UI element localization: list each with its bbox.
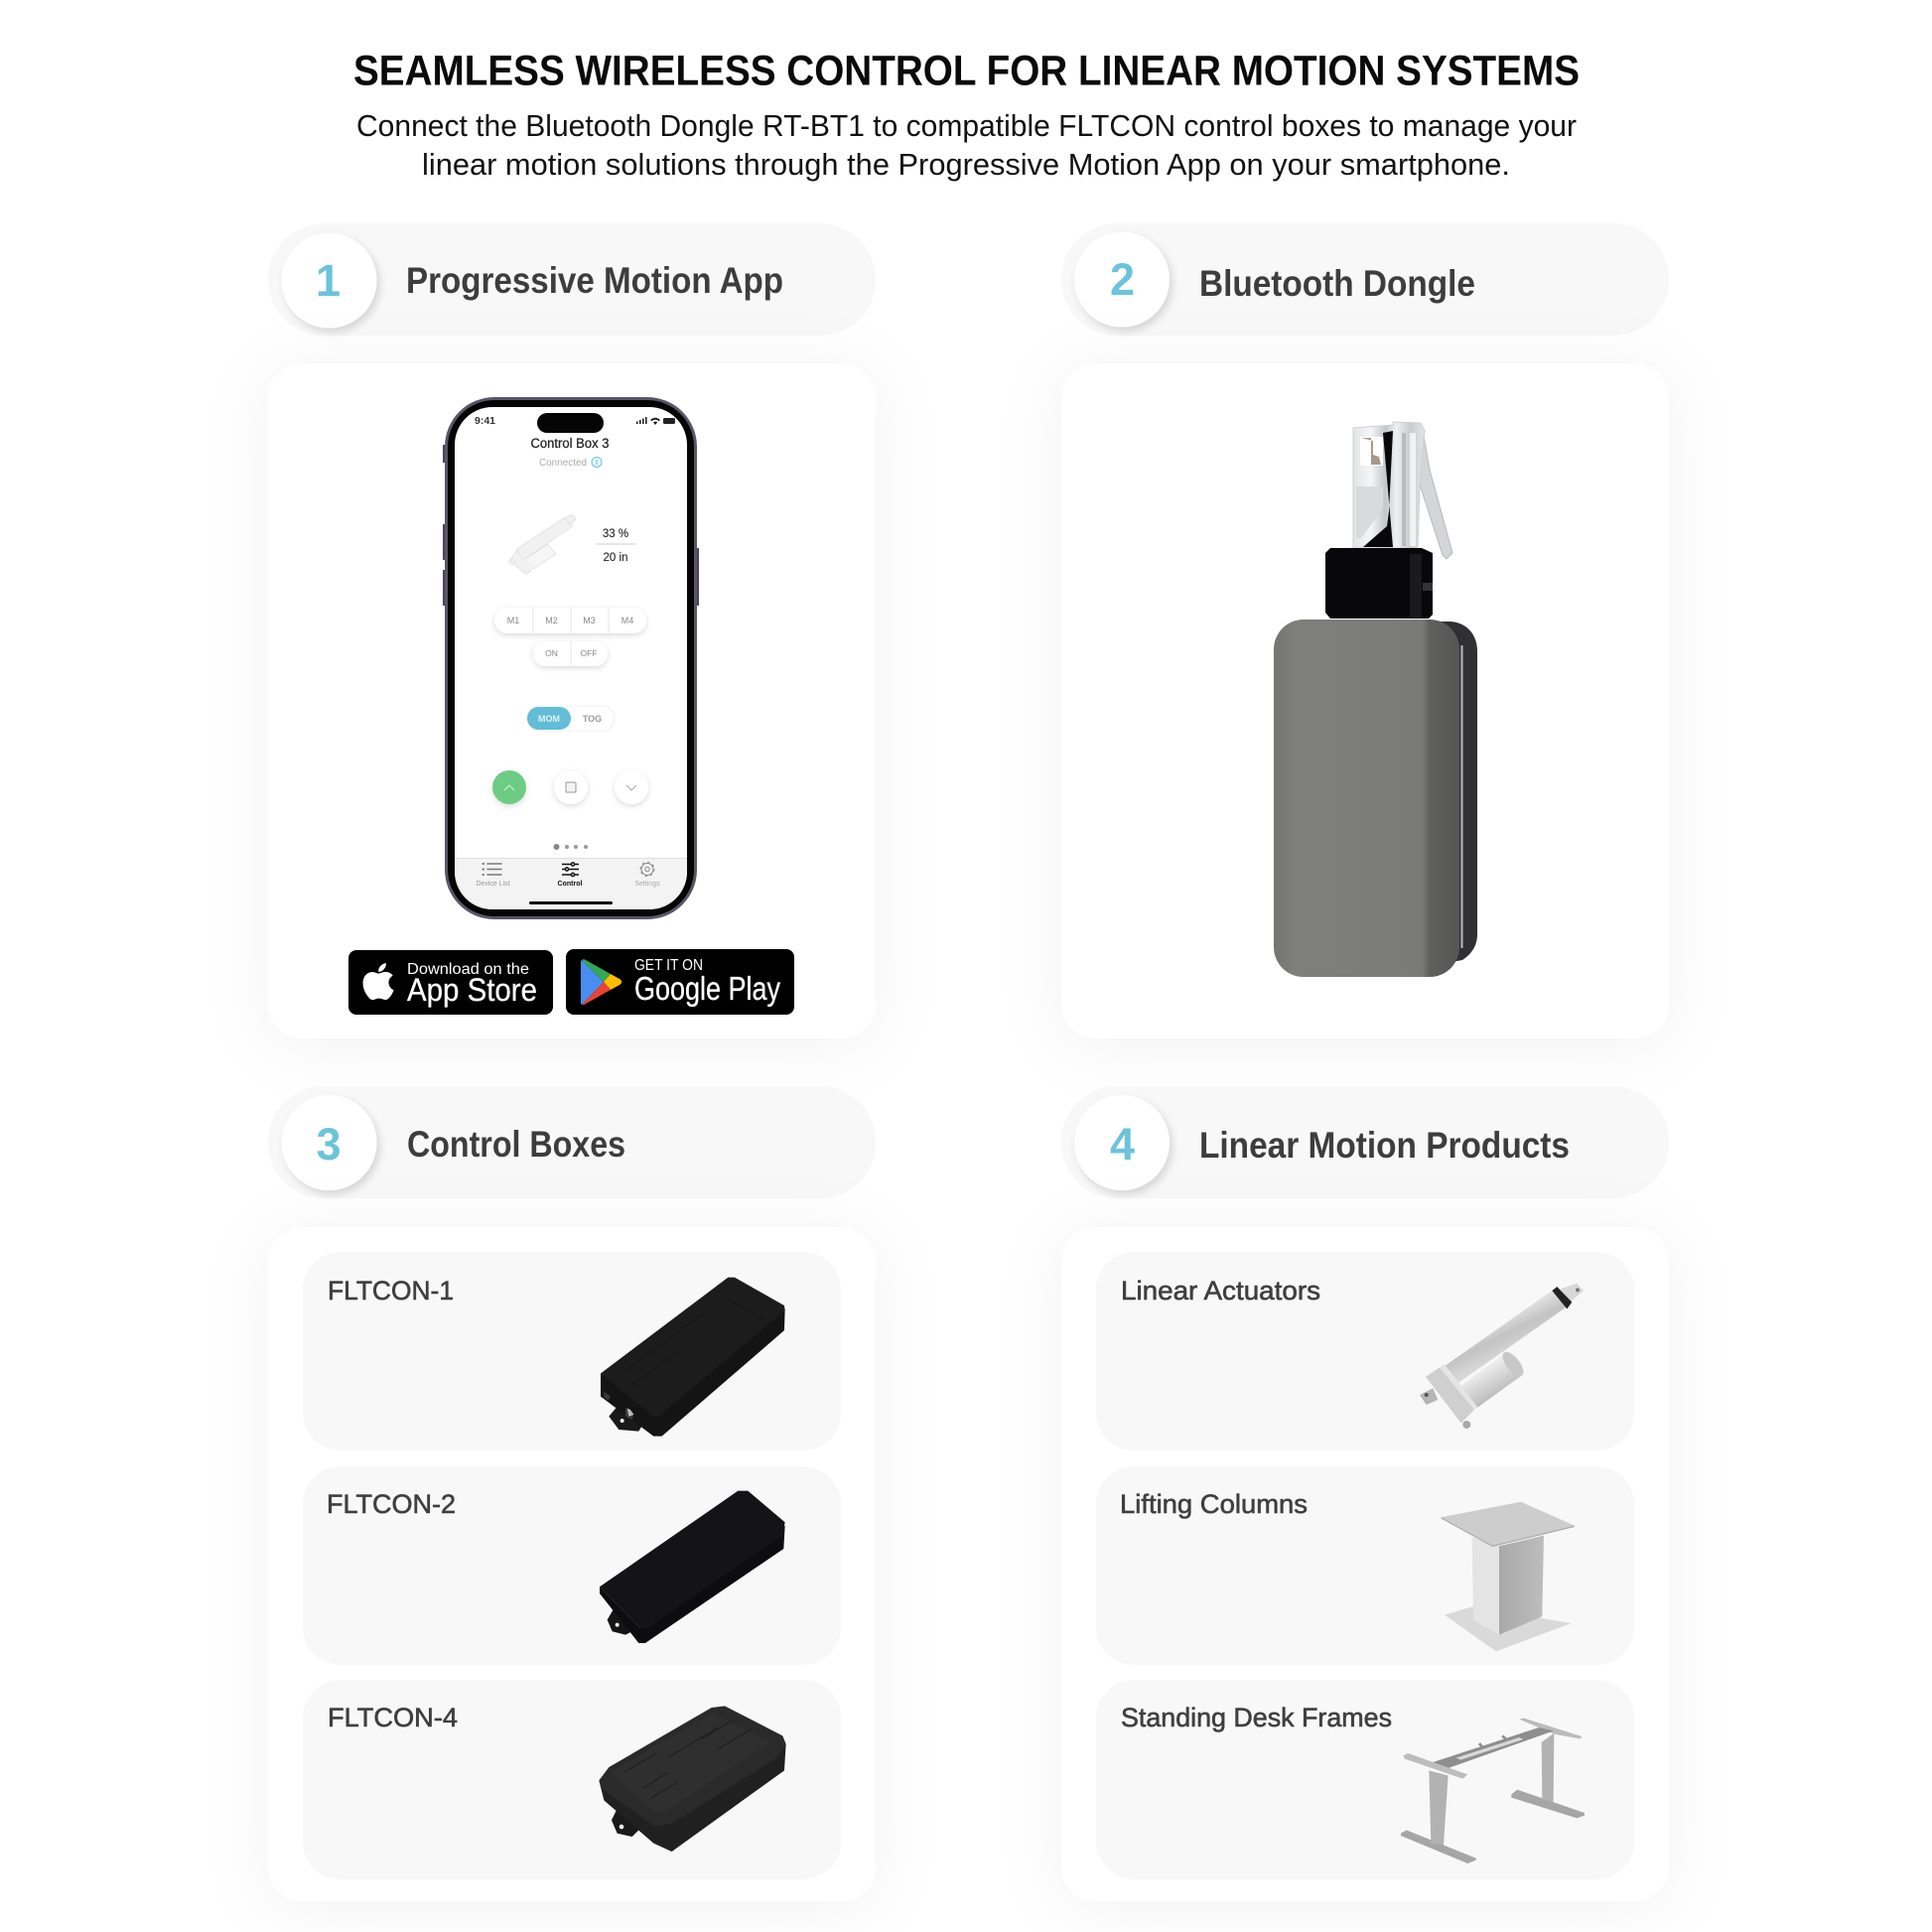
item: Lifting Columns — [1096, 1466, 1634, 1665]
home indicator — [529, 901, 613, 904]
item: Linear Actuators: Linear Actuators — [1121, 1276, 1320, 1306]
panel: linear motion products — [1061, 1227, 1669, 1901]
page dots — [554, 844, 588, 850]
product photo: desk frame — [1401, 1719, 1585, 1863]
on off buttons: OFF — [580, 648, 598, 658]
status bar icons — [636, 417, 675, 425]
on off buttons: ON — [545, 648, 558, 658]
number badge 1: 1 — [316, 255, 341, 306]
item: FLTCON-1: FLTCON-1 — [328, 1276, 454, 1306]
heading: Progressive Motion App: Progressive Motion App — [406, 260, 783, 301]
memory buttons: M3 — [583, 616, 596, 625]
product photo: lifting column — [1442, 1502, 1575, 1651]
memory buttons — [494, 608, 646, 633]
position readout — [597, 528, 635, 564]
mode toggle: TOG — [583, 714, 602, 724]
position readout: 20 in — [604, 552, 627, 564]
subtitle text block: Connect the Bluetooth Dongle RT-BT1 to compatible FLTCON control boxes to manage your — [356, 108, 1577, 143]
clip tab — [1420, 431, 1452, 559]
item: Standing Desk Frames: Standing Desk Frames — [1121, 1703, 1392, 1732]
position readout: 33 % — [603, 528, 628, 540]
item: Standing Desk Frames — [1096, 1680, 1634, 1879]
App Store badge: App Store — [407, 972, 537, 1008]
stop button — [554, 770, 588, 804]
icon: apple — [363, 963, 394, 1000]
number badge 4: 4 — [1110, 1119, 1135, 1170]
tab label: Control: Control — [558, 881, 582, 888]
number badge 4 — [1074, 1095, 1170, 1190]
panel: step 1 header — [268, 223, 876, 336]
number badge 1 — [282, 232, 377, 328]
icon: device list — [483, 864, 501, 875]
Google Play badge — [566, 949, 794, 1015]
panel: dongle card — [1061, 363, 1669, 1038]
heading: Linear Motion Products: Linear Motion Products — [1199, 1125, 1570, 1166]
down button — [615, 770, 648, 804]
memory buttons: M1 — [507, 616, 519, 625]
status bar time: 9:41 — [475, 415, 495, 427]
panel: step 4 header — [1061, 1086, 1669, 1198]
item: Linear Actuators — [1096, 1252, 1634, 1450]
item: FLTCON-2 — [303, 1466, 841, 1665]
mode toggle — [527, 706, 615, 731]
tab label: Settings: Settings — [634, 881, 660, 888]
clear RJ45 plug — [1353, 422, 1425, 548]
panel: app card — [348, 397, 794, 1015]
item: FLTCON-1 — [303, 1252, 841, 1450]
actuator thumbnail — [509, 514, 576, 574]
App Store badge — [348, 950, 553, 1015]
subtitle text block — [356, 108, 1577, 182]
item: FLTCON-4 — [303, 1680, 841, 1879]
number badge 2 — [1074, 232, 1170, 328]
icon: play triangle — [581, 959, 621, 1005]
icon: control sliders — [562, 863, 579, 877]
memory buttons: M4 — [621, 616, 633, 625]
item: FLTCON-4: FLTCON-4 — [328, 1703, 458, 1732]
icon: settings gear — [640, 862, 654, 876]
product photo: FLTCON-1 — [601, 1278, 785, 1437]
panel: step 2 header — [1061, 223, 1669, 336]
on off buttons — [533, 641, 608, 666]
Google Play badge: Google Play — [634, 970, 780, 1007]
number badge 2: 2 — [1110, 254, 1135, 305]
black connector — [1325, 548, 1433, 619]
front housing — [1274, 620, 1459, 977]
up button — [492, 770, 526, 804]
mode toggle: MOM — [538, 714, 560, 724]
product photo: FLTCON-4 — [599, 1706, 786, 1852]
Google Play badge: GET IT ON — [634, 957, 703, 974]
item: Lifting Columns: Lifting Columns — [1120, 1489, 1308, 1519]
rear housing — [1435, 621, 1477, 965]
smartphone mockup — [443, 397, 699, 919]
panel: control boxes — [268, 1227, 876, 1901]
tab bar — [455, 858, 687, 909]
title: SEAMLESS WIRELESS CONTROL FOR LINEAR MOTION SYSTEMS — [353, 48, 1580, 95]
panel: step 3 header — [268, 1086, 876, 1198]
App Store badge: Download on the — [407, 961, 529, 978]
screen title: Control Box 3 — [530, 436, 610, 451]
product photo: FLTCON-2 — [600, 1491, 785, 1643]
number badge 3: 3 — [316, 1119, 342, 1170]
item: FLTCON-2: FLTCON-2 — [327, 1489, 456, 1519]
bluetooth dongle product — [1274, 422, 1477, 977]
connection status: Connected — [539, 457, 587, 469]
subtitle text block: linear motion solutions through the Progressive Motion App on your smartphone. — [422, 147, 1510, 182]
heading: Bluetooth Dongle: Bluetooth Dongle — [1199, 263, 1475, 304]
tab label: Device List: Device List — [476, 881, 510, 888]
product photo: linear actuator — [1420, 1284, 1584, 1429]
heading: Control Boxes: Control Boxes — [407, 1124, 625, 1165]
number badge 3 — [282, 1095, 377, 1190]
dynamic island — [537, 413, 604, 433]
memory buttons: M2 — [545, 616, 558, 625]
